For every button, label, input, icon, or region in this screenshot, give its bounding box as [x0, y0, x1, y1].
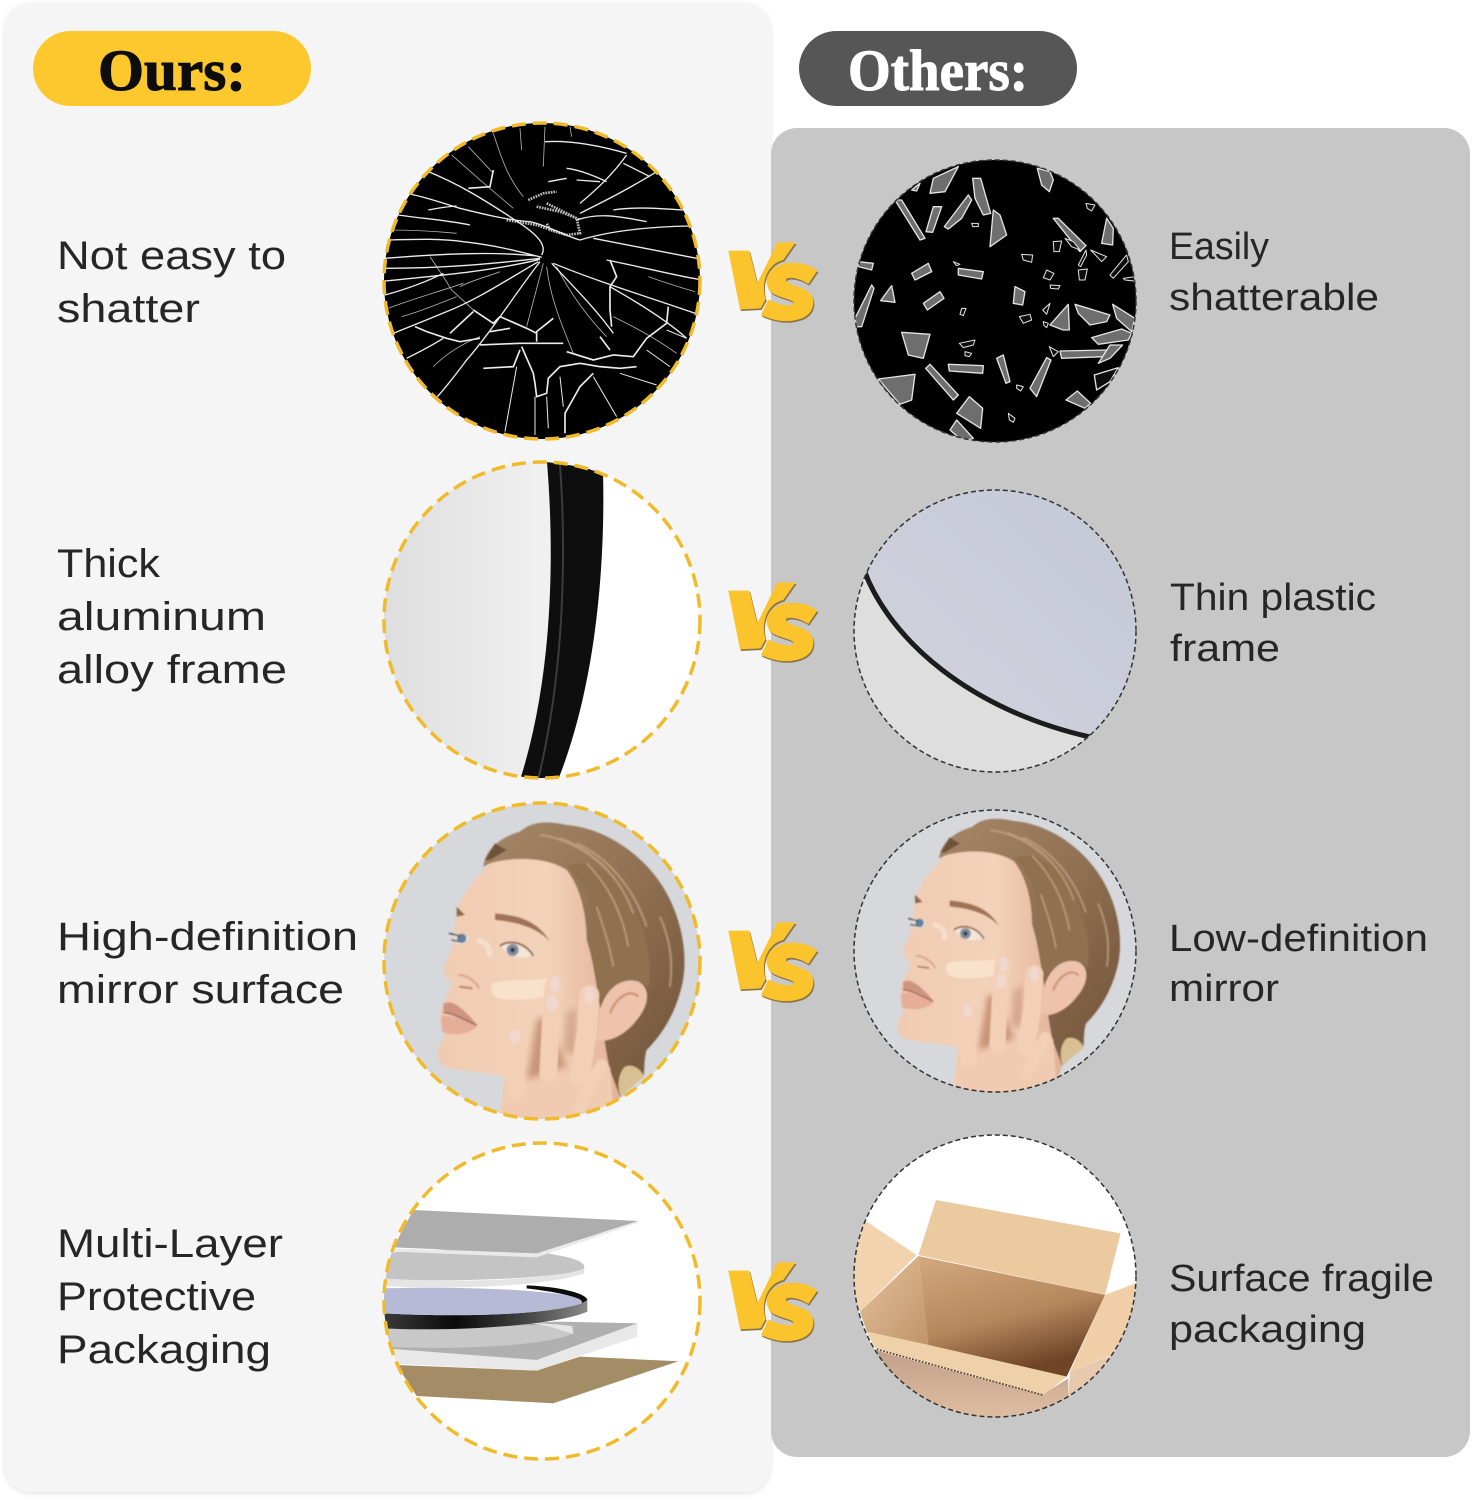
icon: VS badge 3 — [728, 922, 818, 1003]
text: thin plastic frame — [1170, 577, 1376, 670]
icon: VS badge 4 — [728, 1262, 818, 1343]
heading: Others: Others: — [848, 38, 1028, 103]
text: high-definition mirror surface: mirror surface — [57, 968, 344, 1012]
panel: others background — [771, 128, 1470, 1457]
text: thick aluminum alloy frame — [57, 542, 287, 692]
text: easily shatterable: Easily — [1169, 226, 1269, 268]
text: thin plastic frame: Thin plastic — [1170, 577, 1376, 619]
text: multi-layer protective packaging — [57, 1222, 283, 1372]
heading: Ours: Ours: — [98, 38, 246, 103]
image: cardboard box circle — [850, 1135, 1140, 1423]
text: thin plastic frame: frame — [1170, 628, 1280, 670]
image: multi-layer packaging circle — [383, 1143, 700, 1459]
text: high-definition mirror surface — [57, 915, 358, 1012]
text: surface fragile packaging: packaging — [1169, 1309, 1366, 1351]
image: high-definition face circle — [384, 803, 700, 1130]
text: easily shatterable: shatterable — [1169, 277, 1379, 319]
panel: ours background — [4, 3, 771, 1493]
text: surface fragile packaging: Surface fragile — [1169, 1258, 1434, 1300]
text: not easy to shatter: shatter — [57, 287, 200, 331]
text: multi-layer protective packaging: Packaging — [57, 1328, 271, 1372]
text: low-definition mirror: Low-definition — [1169, 918, 1428, 960]
icon: VS badge 1 — [728, 242, 818, 323]
image: low-definition face circle — [854, 810, 1136, 1096]
icon: VS badge 2 — [728, 582, 818, 663]
text: thick aluminum alloy frame: Thick — [57, 542, 161, 586]
heading: Others — [799, 31, 1077, 106]
image: cracked glass circle — [384, 123, 700, 439]
image: thick aluminum frame circle — [384, 462, 700, 780]
text: multi-layer protective packaging: Protective — [57, 1275, 256, 1319]
text: low-definition mirror — [1169, 918, 1428, 1010]
image: shattered glass circle — [854, 160, 1136, 442]
text: not easy to shatter: Not easy to — [57, 234, 286, 278]
image: thin plastic frame circle — [854, 480, 1140, 772]
heading: Ours — [33, 31, 311, 106]
text: low-definition mirror: mirror — [1169, 968, 1279, 1010]
text: not easy to shatter — [57, 234, 286, 331]
text: easily shatterable — [1169, 226, 1379, 319]
text: high-definition mirror surface: High-definition — [57, 915, 358, 959]
text: thick aluminum alloy frame: aluminum — [57, 595, 266, 639]
text: thick aluminum alloy frame: alloy frame — [57, 648, 287, 692]
text: multi-layer protective packaging: Multi-Layer — [57, 1222, 283, 1266]
text: surface fragile packaging — [1169, 1258, 1434, 1351]
